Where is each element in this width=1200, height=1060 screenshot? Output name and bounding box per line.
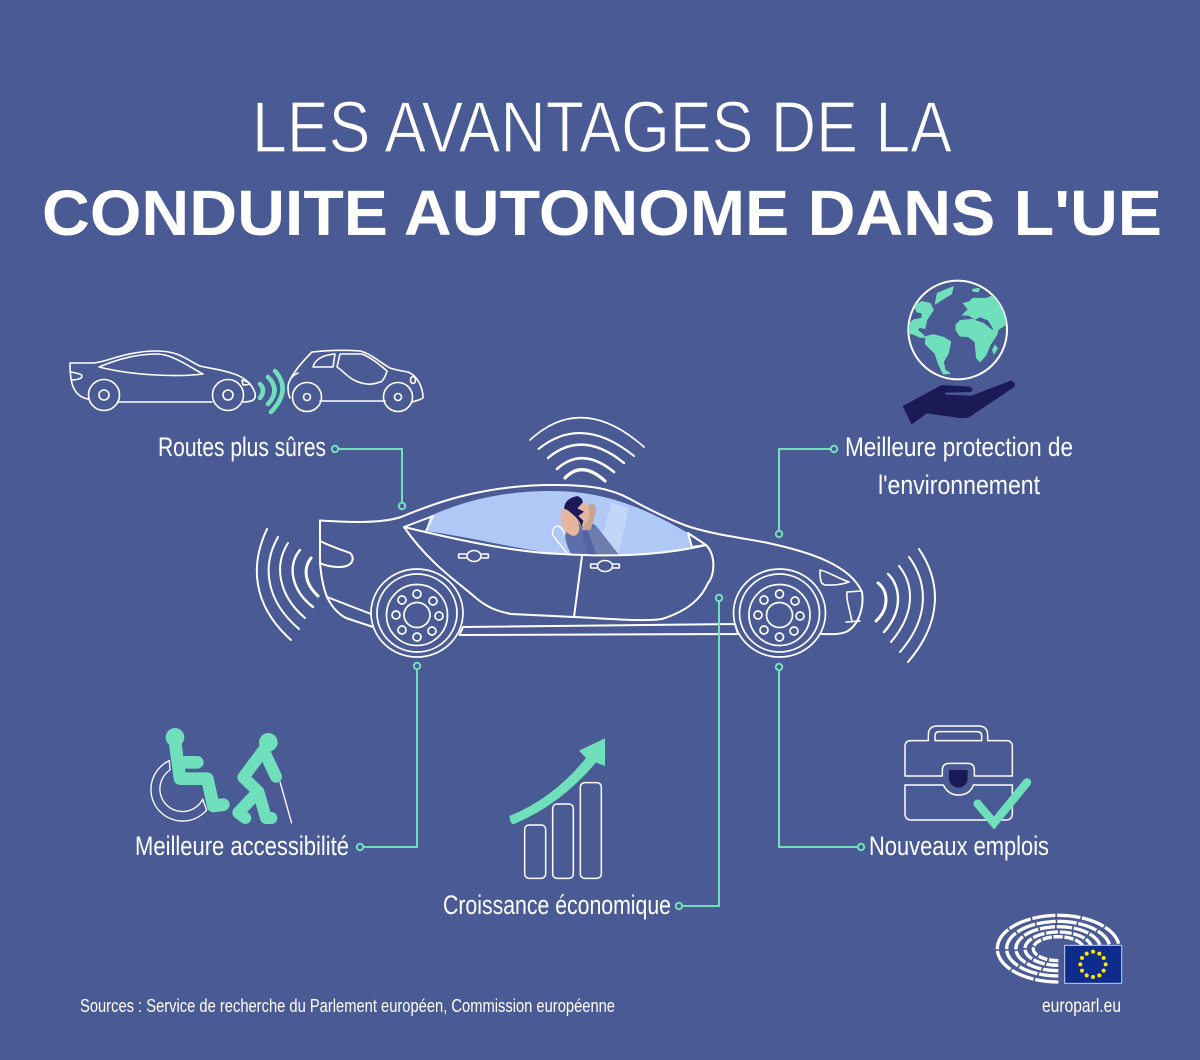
hemicycle: [997, 915, 1119, 982]
sensor waves: [260, 371, 283, 412]
label: nouveaux emplois: Nouveaux emplois: [869, 831, 1049, 861]
icon: growth chart: [509, 738, 605, 878]
wheelchair wheel: [151, 761, 207, 821]
body lines: [320, 485, 862, 635]
hand: [903, 381, 1015, 425]
title: LES AVANTAGES DE LA: [252, 88, 952, 168]
walking person: [238, 748, 276, 818]
window glass: [426, 491, 692, 556]
rear wheel: [371, 569, 463, 657]
front city car: [288, 350, 423, 412]
connector: emplois: [776, 664, 864, 850]
eu flag: [1065, 945, 1122, 983]
door handles: [458, 554, 488, 558]
connector: environnement: [776, 446, 837, 537]
icon: two cars with sensor waves: [70, 350, 423, 412]
label: meilleure protection de l'environnement: Meilleure protection de: [845, 432, 1073, 462]
autonomous car: [320, 485, 862, 657]
car sensor waves: rear: [257, 529, 318, 640]
title: [42, 88, 1162, 249]
connector: croissance: [676, 595, 722, 909]
check mark: [978, 782, 1027, 823]
connector: routes plus sûres: [332, 446, 405, 509]
cane: [280, 782, 292, 823]
globe: [908, 281, 1013, 379]
icon: wheelchair user and walker: [151, 728, 292, 823]
europarl.eu: europarl.eu: [1042, 996, 1121, 1017]
label: meilleure accessibilité: Meilleure accessibilité: [135, 831, 349, 861]
icon: globe in hand: [903, 281, 1015, 425]
wheelchair person: [175, 742, 223, 806]
label: meilleure protection de l'environnement: [845, 432, 1073, 500]
lock: [949, 770, 968, 788]
rear sports car: [70, 351, 255, 410]
front wheel: [734, 569, 826, 657]
label: routes plus sûres: Routes plus sûres: [158, 432, 326, 462]
briefcase: [905, 726, 1012, 820]
lights: [820, 570, 849, 585]
title: CONDUITE AUTONOME DANS L'UE: [42, 177, 1162, 249]
connector: accessibilité: [357, 663, 420, 850]
bars: [525, 783, 601, 878]
label: meilleure protection de l'environnement: l'environnement: [878, 470, 1040, 500]
label: croissance économique: Croissance économique: [443, 890, 671, 920]
car sensor waves: top: [530, 418, 644, 481]
logo: european parliament: [997, 915, 1122, 1017]
icon: briefcase with check: [905, 726, 1027, 823]
driver: [553, 496, 636, 555]
rising arrow: [509, 738, 605, 824]
car sensor waves: front: [876, 549, 935, 662]
sources: Sources : Service de recherche du Parlement européen, Commission européenne: [80, 995, 615, 1016]
